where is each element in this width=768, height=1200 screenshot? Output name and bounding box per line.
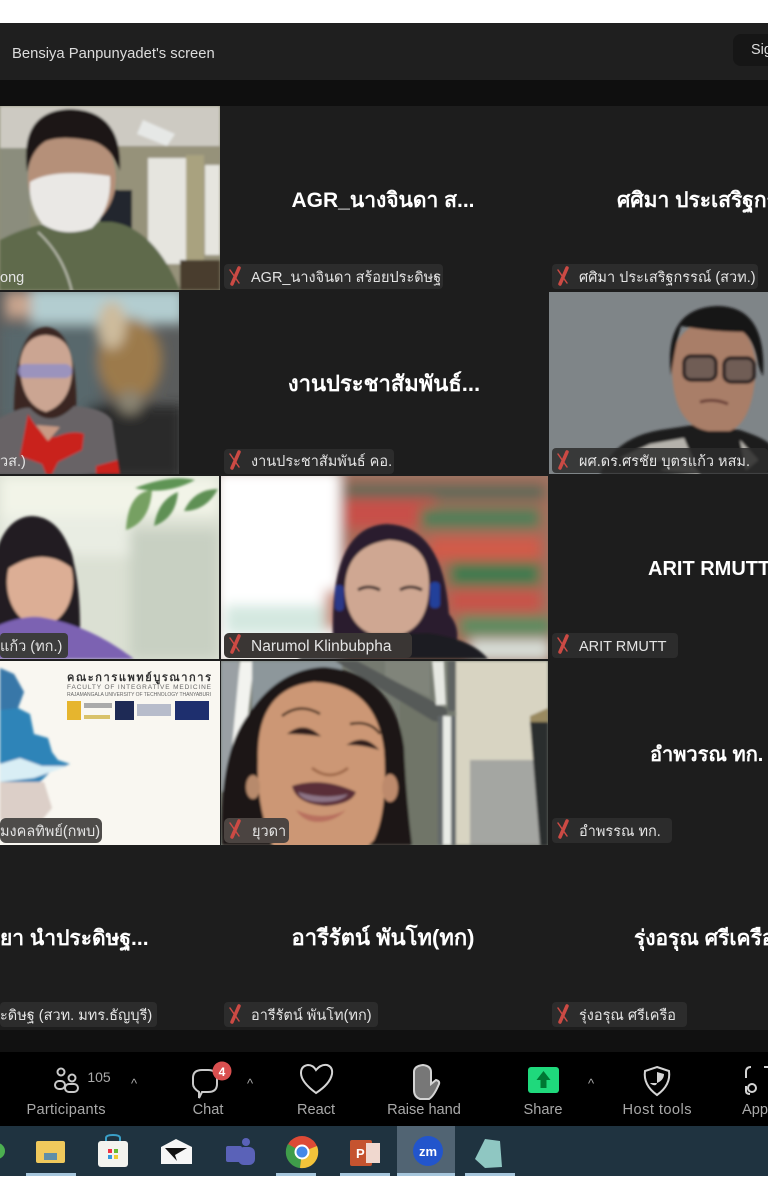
name tag: bottom left	[0, 1002, 157, 1027]
name tag: faculty slide	[0, 818, 102, 843]
windows taskbar	[0, 1126, 768, 1176]
icon: powerpoint	[350, 1140, 380, 1166]
host tools	[622, 1067, 692, 1118]
icon: teams	[226, 1138, 255, 1165]
tile: AGR: AGR_นางจินดา ส...	[292, 189, 474, 212]
faculty heading: คณะการแพทย์บูรณาการ	[67, 671, 211, 685]
tile: masked man video	[0, 106, 220, 292]
name tag: man with glasses	[552, 448, 768, 473]
participants: ^	[131, 1076, 138, 1091]
name tag: Narumol	[224, 633, 412, 658]
tile: faculty slide	[0, 661, 220, 845]
active indicators	[26, 1173, 515, 1176]
name tag: AGR: AGR_นางจินดา สร้อยประดิษฐ	[251, 269, 441, 286]
presenter label: Bensiya Panpunyadet's screen	[12, 46, 215, 62]
name tag: bottom right	[552, 1002, 687, 1027]
host tools: Host tools	[622, 1102, 692, 1118]
name tag: public relations	[224, 449, 394, 474]
name tag: woman in purple	[0, 633, 68, 658]
name tag: amphawan: อำพรรณ ทก.	[579, 824, 661, 840]
name tag: amphawan	[552, 818, 672, 843]
icon: zoom	[413, 1136, 443, 1166]
name tag: woman in purple: แก้ว (ทก.)	[0, 638, 62, 655]
faculty logos	[67, 701, 209, 720]
tile: man with glasses video	[549, 292, 768, 474]
icon: powerpoint: P	[356, 1146, 365, 1161]
apps	[742, 1067, 768, 1118]
name tag: ARIT RMUTT: ARIT RMUTT	[579, 639, 667, 655]
name tag: bottom left: ะดิษฐ (สวท. มทร.ธัญบุรี)	[0, 1007, 152, 1024]
tile: faculty slide: RAJAMANGALA UNIVERSITY OF TECHNOLOGY THANYABURI	[67, 692, 211, 698]
name tag: bottom right: รุ่งอรุณ ศรีเครือ	[579, 1007, 676, 1024]
sign button	[733, 34, 768, 66]
name tag: smiling woman: ยุวดา	[252, 824, 286, 840]
raise hand	[387, 1065, 461, 1118]
icon: mail	[161, 1139, 192, 1164]
tile: faculty slide: FACULTY OF INTEGRATIVE MEDICINE	[67, 684, 212, 691]
icon: store	[98, 1135, 128, 1167]
tile: woman in purple video	[0, 476, 219, 659]
tile: woman in red video	[0, 288, 185, 480]
icon: zoom: zm	[419, 1144, 437, 1159]
chat	[193, 1062, 254, 1118]
tile: amphawan: อำพวรณ ทก.	[650, 744, 763, 766]
share: ^	[588, 1076, 595, 1091]
participants	[26, 1068, 138, 1118]
participants: Participants	[26, 1102, 106, 1118]
chat: ^	[247, 1076, 254, 1091]
react: React	[297, 1102, 335, 1118]
name tag: public relations: งานประชาสัมพันธ์ คอ.	[251, 453, 392, 470]
icon: green app	[0, 1143, 5, 1159]
name tag: bottom middle	[224, 1002, 378, 1027]
name tag: bottom middle: อารีรัตน์ พันโท(ทก)	[251, 1006, 372, 1024]
name tag: woman in red: วส.)	[0, 454, 26, 470]
icon: notes app	[475, 1139, 502, 1168]
tile: bottom middle name: อารีรัตน์ พันโท(ทก)	[292, 924, 474, 950]
name tag: AGR	[224, 264, 443, 289]
chat: Chat	[193, 1102, 223, 1118]
tile: ARIT RMUTT: ARIT RMUTT	[648, 558, 768, 580]
tile: Narumol video	[215, 470, 550, 665]
zoom toolbar	[0, 1052, 768, 1126]
name tag: third: ศศิมา ประเสริฐกรรณ์ (สวท.)	[579, 269, 756, 286]
tile: bottom left name: ยา นำประดิษฐ...	[0, 927, 149, 952]
name tag: ong: ong	[0, 270, 24, 286]
raise hand: Raise hand	[387, 1102, 461, 1118]
title bar	[0, 23, 768, 80]
zoom active highlight	[397, 1126, 455, 1176]
share: Share	[524, 1102, 562, 1118]
name tag: ARIT RMUTT	[552, 633, 678, 658]
react	[297, 1065, 335, 1118]
name tag: third	[552, 264, 758, 289]
participants: 105	[87, 1069, 111, 1085]
blue artwork	[0, 668, 70, 820]
name tag: faculty slide: มงคลทิพย์(กพบ)	[0, 823, 100, 840]
tile: public relations: งานประชาสัมพันธ์...	[288, 371, 480, 396]
name tag: smiling woman	[224, 818, 289, 843]
icon: folder	[36, 1141, 65, 1163]
name tag: Narumol: Narumol Klinbubpha	[251, 638, 392, 655]
chat: 4	[219, 1065, 226, 1079]
share	[524, 1067, 595, 1118]
icon: chrome	[286, 1136, 318, 1168]
tile: smiling woman video	[221, 661, 548, 848]
name tag: man with glasses: ผศ.ดร.ศรชัย บุตรแก้ว หสม.	[579, 453, 750, 470]
